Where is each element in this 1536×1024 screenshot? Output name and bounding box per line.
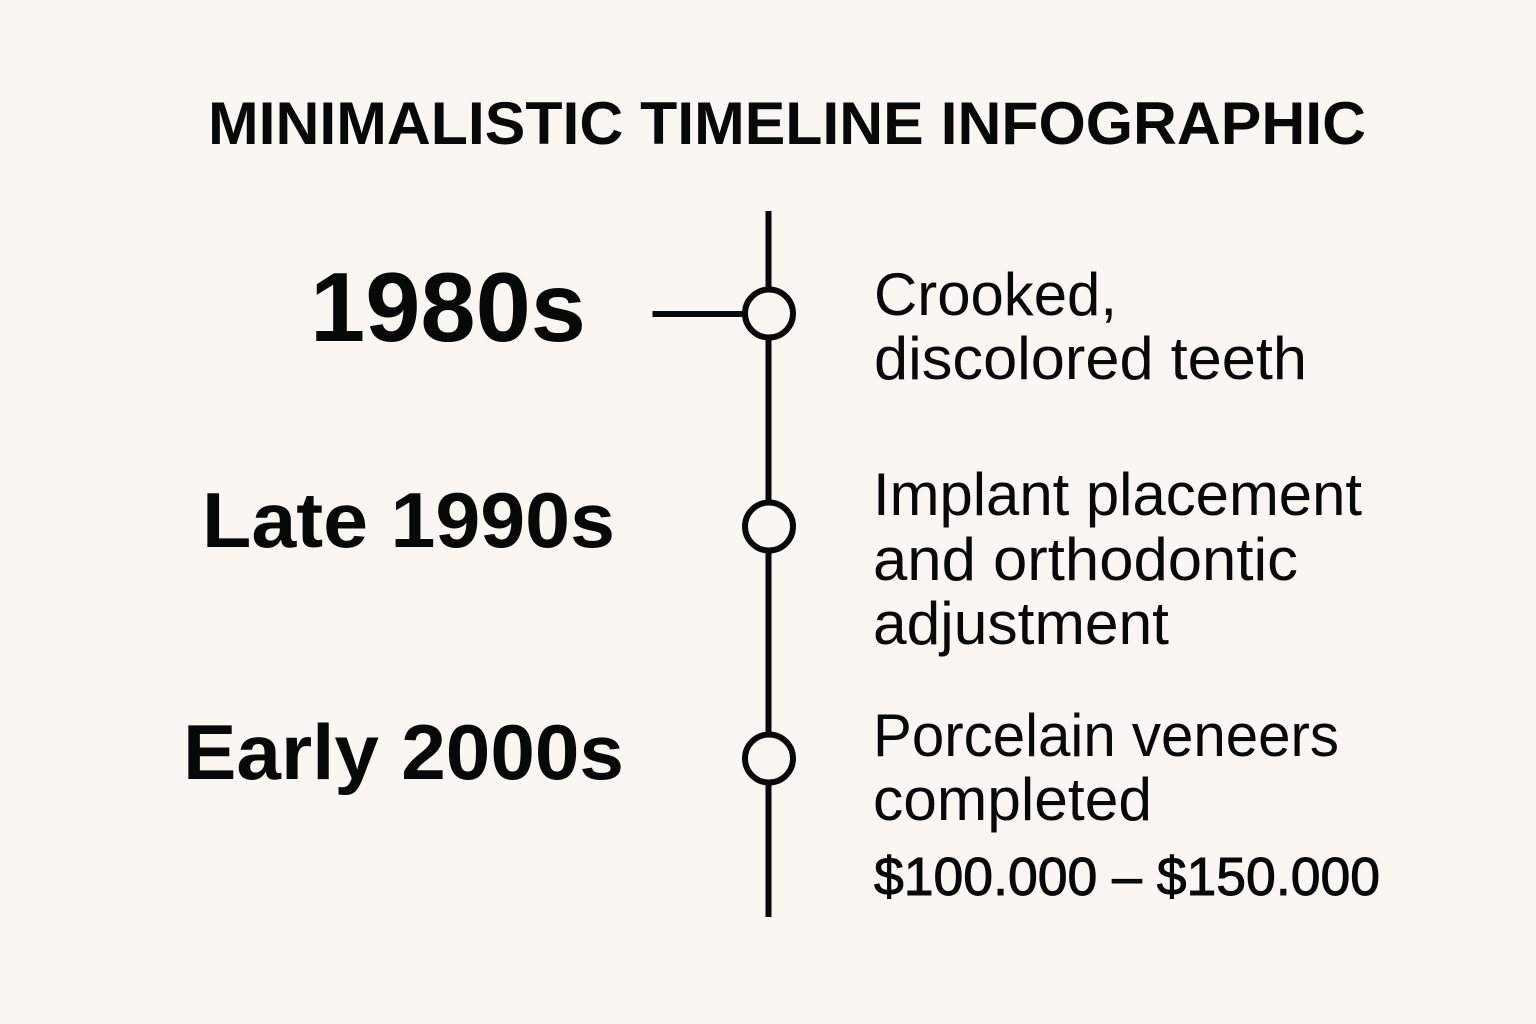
description: 1980s: discolored teeth (874, 325, 1307, 392)
description: late 1990s (873, 461, 1362, 657)
description: late 1990s: adjustment (873, 590, 1169, 657)
description: early 2000s (873, 702, 1339, 833)
description: late 1990s: Implant placement (873, 461, 1362, 528)
description: early 2000s: Porcelain veneers (873, 702, 1339, 769)
label: 1980s: 1980s (310, 252, 586, 362)
description: late 1990s: and orthodontic (873, 526, 1298, 593)
title: MINIMALISTIC TIMELINE INFOGRAPHIC (208, 90, 1366, 157)
description: 1980s: Crooked, (874, 261, 1117, 328)
timeline axis (766, 211, 772, 917)
label: late 1990s: Late 1990s (202, 476, 615, 564)
node: late 1990s (745, 502, 793, 550)
connector: 1980s (652, 311, 745, 317)
description: early 2000s: completed (873, 766, 1152, 833)
node: 1980s (745, 290, 793, 338)
description: 1980s (874, 261, 1307, 392)
cost range: $100.000 – $150.000 (874, 847, 1380, 907)
label: early 2000s: Early 2000s (183, 708, 624, 796)
node: early 2000s (745, 734, 793, 782)
